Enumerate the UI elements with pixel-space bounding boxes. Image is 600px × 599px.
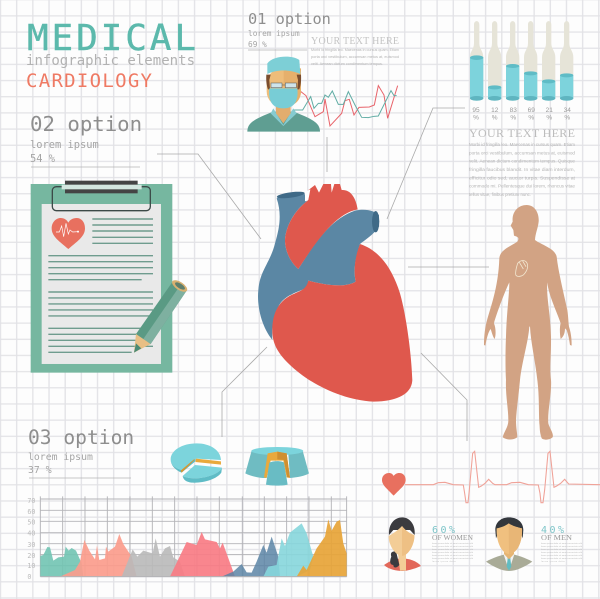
top text block: YOUR TEXT HERE [311, 36, 399, 47]
ampoule percentages: % [510, 114, 516, 122]
icon: doctor [247, 57, 320, 132]
option 01 heading: 01 option [248, 10, 331, 28]
icon: heart with pulse [52, 218, 85, 249]
ampoule percentages [472, 107, 571, 122]
ampoule percentages: % [528, 114, 534, 122]
area chart: 20 [27, 552, 35, 560]
connector lines [157, 108, 489, 441]
area chart: 10 [27, 562, 35, 570]
ampoule 95 [470, 21, 483, 101]
ampoule 12 [488, 21, 501, 101]
title: infographic elements [26, 53, 195, 69]
men statistic: lorem ipsum dolor sit amet consectetur elit [541, 545, 582, 548]
men statistic: OF MEN [541, 534, 573, 542]
ampoule 34 [560, 21, 573, 101]
ampoule percentages: % [473, 114, 479, 122]
right text block: efficitur odio sed, auctor turpis. Suspendisse at [469, 175, 576, 180]
women statistic: lorem ipsum dolor sit amet consectetur elit [432, 554, 473, 557]
right text block: fringilla faucibus blandit. In vitae diam interdum, [469, 167, 575, 172]
icon: clipboard [31, 181, 189, 373]
ecg line [405, 451, 600, 503]
area chart [27, 496, 347, 581]
right text block: YOUR TEXT HERE [469, 126, 575, 140]
right text block [469, 126, 576, 197]
women statistic: lorem ipsum dolor sit amet consectetur elit [432, 542, 473, 545]
top text block: Morbi id fringilla leo. Maecenas in cursus quam. Etiam [311, 48, 399, 52]
right text block: commodo mi. Pellentesque dui lorem, rhoncus vitae [469, 184, 576, 189]
men statistic: lorem ipsum dolor sit amet consectetur elit [541, 554, 582, 557]
women statistic: lorem ipsum dolor sit amet consectetur elit [432, 548, 473, 551]
ampoule percentages: % [564, 114, 570, 122]
heart illustration [258, 184, 412, 402]
area chart: 60 [27, 508, 35, 516]
ampoule percentages: 34 [564, 107, 571, 114]
men statistic: lorem ipsum dolor sit amet consectetur elit [541, 557, 582, 560]
women statistic: lorem ipsum dolor sit amet consectetur elit [432, 551, 473, 554]
option 02 heading: lorem ipsum [30, 139, 99, 151]
ampoule percentages: 21 [546, 107, 553, 114]
men statistic: 40% [541, 525, 564, 536]
chart: ampoule bars [470, 21, 573, 101]
men statistic: lorem ipsum dolor sit amet consectetur elit [541, 551, 582, 554]
icon: pie chart [171, 443, 222, 483]
women statistic: lorem ipsum dolor sit amet consectetur elit [432, 545, 473, 548]
option 02 heading: 54 % [30, 153, 56, 165]
option 02 heading [30, 112, 142, 167]
option 01 heading: lorem ipsum [248, 29, 300, 38]
title: MEDICAL [27, 18, 196, 59]
option 03 heading: 03 option [28, 426, 134, 449]
icon: woman [384, 517, 421, 571]
option 01 heading: 69 % [248, 40, 267, 49]
icon: cone chart [245, 447, 309, 486]
ampoule percentages: 12 [491, 107, 499, 114]
women statistic: lorem ipsum dolor [432, 560, 456, 563]
women statistic [432, 525, 474, 563]
right text block: Morbi id fringilla leo. Maecenas in cursus quam. Etiam [469, 142, 575, 147]
ampoule percentages: % [546, 114, 552, 122]
right text block: porta orci vestibulum, accumsan metus at, euismod [469, 150, 576, 155]
ampoule percentages: 95 [472, 107, 480, 114]
men statistic: lorem ipsum dolor sit amet consectetur elit [541, 548, 582, 551]
icon: man [486, 517, 532, 571]
title [26, 18, 196, 92]
icon: pencil [134, 278, 189, 353]
right text block: velit. Aenean dictum condimentum tempus. Quisque [469, 159, 576, 164]
ampoule 21 [542, 21, 555, 101]
option 01 heading [248, 10, 331, 50]
area chart: 40 [27, 530, 35, 538]
area chart: 70 [27, 497, 35, 505]
small heart outline [516, 261, 528, 276]
area chart: 0 [27, 573, 31, 581]
option 03 heading: 37 % [28, 465, 52, 476]
men statistic [541, 525, 582, 563]
top text block: velit. Aenean dictum condimentum tempus. [311, 62, 383, 66]
line chart [293, 86, 398, 126]
area chart: 50 [27, 519, 35, 527]
top text block: porta orci vestibulum, accumsan metus at, euismod [311, 55, 399, 59]
women statistic: 60% [432, 525, 455, 536]
ampoule percentages: % [492, 114, 498, 122]
men statistic: lorem ipsum dolor sit amet consectetur elit [541, 542, 582, 545]
ampoule 83 [506, 21, 519, 101]
right text block: tellus vitae, finibus pretium nunc. [469, 192, 531, 197]
women statistic: OF WOMEN [432, 534, 474, 542]
women statistic: lorem ipsum dolor sit amet consectetur elit [432, 557, 473, 560]
option 03 heading: lorem ipsum [28, 452, 93, 463]
area chart: 30 [27, 541, 35, 549]
human body figure [484, 205, 572, 440]
option 03 heading [28, 426, 134, 478]
option 02 heading: 02 option [30, 112, 142, 136]
icon: small heart [382, 473, 406, 496]
ampoule percentages: 69 [528, 107, 535, 114]
ampoule 69 [524, 21, 537, 101]
ampoule percentages: 83 [510, 107, 517, 114]
top text block [311, 36, 399, 66]
men statistic: lorem ipsum dolor [541, 560, 565, 563]
title: CARDIOLOGY [26, 70, 153, 92]
